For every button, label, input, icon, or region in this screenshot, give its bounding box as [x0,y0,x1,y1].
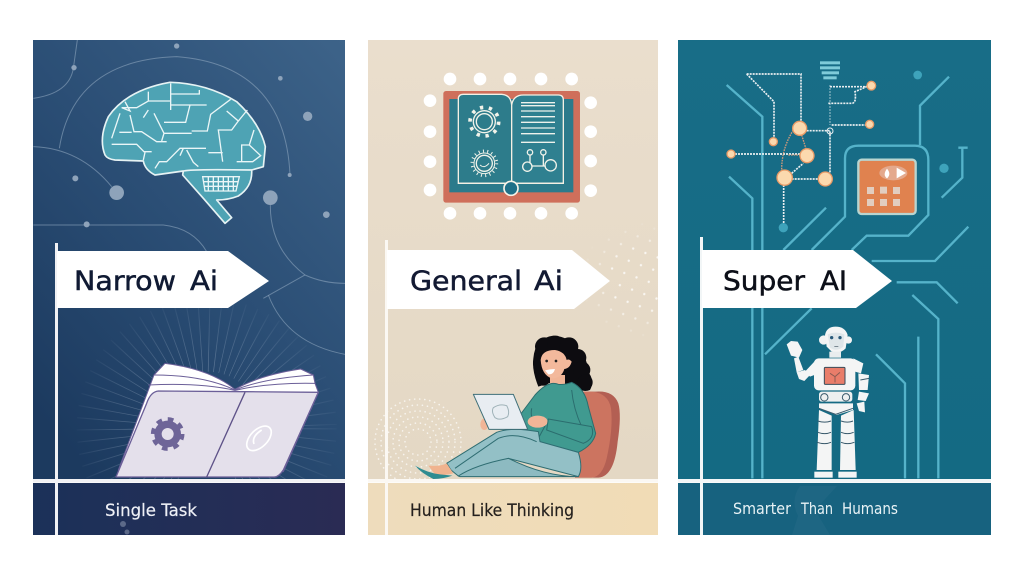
flag: Super AI [702,250,892,308]
caption band [368,483,658,535]
head [819,335,828,345]
ring of dots [424,73,597,220]
caption band [678,483,991,535]
neck and face [550,375,565,390]
circuit background lines [33,40,345,354]
flag: General Ai [387,250,610,309]
gear icons [470,107,499,176]
foot [428,463,453,477]
rays [113,335,300,522]
circuit traces [727,71,968,478]
band dots [120,521,130,534]
right arm [853,358,869,412]
caption: Smarter Than Humans: Humans [842,499,898,518]
flag: General Ai: Ai [534,266,563,297]
node diagram [523,150,556,171]
dotted pattern [598,228,658,332]
icon: chip [858,160,916,214]
flag: Super AI: AI [820,266,847,297]
raised arm [787,341,802,358]
trousers [447,429,581,477]
panel background [368,40,658,479]
hair [533,336,593,391]
caption band [33,483,345,535]
body [814,358,855,390]
icon: open book with gear [116,363,318,477]
flag: Narrow Ai: Narrow [74,266,176,297]
divider and pole [33,243,345,535]
network diagram [727,61,876,223]
illustration: woman with laptop [415,336,620,479]
stack icon [820,61,840,79]
legs [817,410,832,470]
band silhouette [792,486,837,535]
cushion [575,391,620,478]
panel: Super AI [678,40,991,535]
hands [480,419,488,430]
divider and pole [368,240,658,535]
caption: Human Like Thinking: Human Like Thinking [410,501,574,521]
divider and pole [678,237,991,535]
panel background [678,40,991,479]
caption: Smarter Than Humans: Than [800,499,833,518]
panel: General AI [368,40,658,535]
flag: Narrow Ai: Ai [190,266,218,297]
laptop [473,394,528,429]
illustration: robot [787,327,869,478]
text lines [521,103,555,142]
dotted circle [375,399,461,485]
panel background [33,40,345,479]
panel: Narrow AI [33,40,345,535]
flag: General Ai: General [410,266,522,297]
caption: Single Task: Single Task [105,501,197,521]
icon: book with light dots [424,73,597,220]
flag: Narrow Ai [57,251,269,308]
flag: Super AI: Super [723,266,806,297]
caption: Smarter Than Humans: Smarter [733,499,791,518]
sweater [520,382,596,452]
icon: circuit brain [102,82,265,223]
